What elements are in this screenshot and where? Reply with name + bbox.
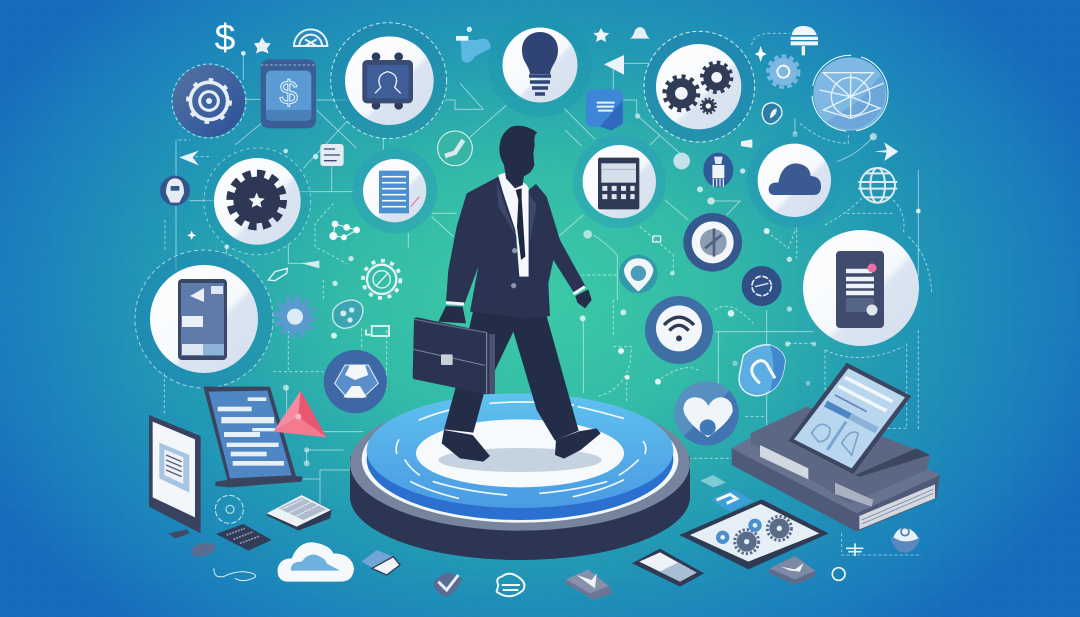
panel: cloud circle: [747, 133, 842, 228]
buttons: [512, 248, 517, 253]
icon: squiggle: [214, 568, 256, 581]
icon: dollar card: $: [279, 75, 298, 112]
briefcase: [413, 317, 495, 394]
icon: blob network: [333, 300, 363, 328]
icon: location pin: [619, 255, 658, 293]
upper right icon cluster: [558, 26, 932, 306]
shirt: [498, 172, 529, 277]
icon: blue puzzle: [456, 27, 491, 63]
icon: check badge: [433, 573, 462, 597]
icon: compass badge: [683, 213, 742, 272]
icon: monitor: [149, 415, 201, 539]
icon: arc badge: [294, 29, 327, 46]
icon: leaf pin: [762, 103, 782, 124]
trousers: [444, 307, 579, 441]
businessman silhouette: [413, 126, 601, 462]
icon: laptop keyboard: [266, 495, 332, 531]
panel: star gear circle: [204, 148, 311, 255]
lower right devices: [565, 296, 940, 600]
icon: right arrow: [874, 142, 898, 161]
icon: sparkle: [187, 231, 196, 240]
icon: star: [254, 37, 271, 53]
cuffs: [446, 287, 585, 304]
icon: tablet on books: [788, 363, 911, 474]
tie: [516, 188, 525, 260]
icon: t-shaped marker: [846, 543, 863, 556]
icon: dollar card: [261, 59, 316, 128]
panel: tablet circle: [803, 230, 919, 346]
icon: line globe: [858, 168, 897, 203]
icon: pointer triangle: [302, 261, 319, 268]
icon: gear: [276, 298, 314, 335]
left hand and handle: [438, 306, 466, 323]
icon: hexagon badge: [324, 350, 387, 413]
icon: pink pyramid: [273, 391, 327, 437]
back shoe: [442, 430, 490, 462]
icon: small robot badge: [160, 176, 190, 206]
icon: standing tablet: [203, 387, 302, 487]
panel: phone circle: [135, 250, 273, 388]
icon: grey tile left: [565, 569, 612, 600]
icon: target gear badge: [172, 64, 246, 138]
icon: book stack: [732, 407, 940, 532]
icon: white cloud: [278, 542, 354, 582]
icon: small phone: [632, 549, 704, 587]
upper left icon cluster: [160, 16, 507, 300]
icon: usb badge: [703, 153, 733, 187]
front shoe: [555, 428, 601, 459]
icon: check badge: [438, 131, 472, 166]
icon: shield swirl: [739, 345, 785, 396]
icon: molecule: [329, 221, 360, 240]
icon: navy globe badge: [742, 266, 782, 306]
panel: document circle: [352, 148, 437, 233]
lower left devices: [149, 298, 524, 597]
icon: left arrow: [179, 151, 199, 165]
icon: bowl: [891, 527, 920, 553]
icon: black keyboard: [216, 524, 272, 551]
dot: [673, 153, 690, 169]
icon: burger: [497, 574, 524, 596]
icon: dollar sign: $: [215, 16, 236, 58]
icon: sparkle: [755, 46, 767, 62]
icon: wifi badge: [645, 296, 713, 364]
lapel: [497, 182, 517, 237]
icon: small map tiles: [700, 475, 753, 512]
icon: outlined gear: [363, 261, 400, 298]
panel: calculator circle: [573, 135, 666, 228]
right hand: [575, 289, 592, 308]
icon: grey tile right: [769, 556, 815, 585]
panel: gears circle: [644, 31, 755, 142]
icon: device: [362, 550, 400, 575]
platform: [350, 393, 690, 560]
panel: safe icon circle: [331, 23, 447, 139]
icon: small chat tag: [653, 236, 661, 242]
icon: pencil: [268, 268, 287, 281]
icon: ring: [832, 568, 845, 580]
lightbulb circle: [488, 13, 592, 117]
icon: heart badge: [675, 381, 739, 445]
icon: dashed dial: [215, 495, 243, 523]
icon: small monitor: [366, 326, 389, 336]
icon: globe sphere: [812, 55, 888, 131]
icon: mouse: [191, 543, 216, 557]
icon: blue chat document: [586, 89, 623, 131]
head: [499, 126, 537, 188]
icon: small speaker: [741, 139, 752, 148]
icon: dome: [630, 27, 650, 39]
icon: star: [593, 28, 609, 42]
icon: lying tablet with gears: [679, 499, 829, 569]
icon: pale blue gear: [768, 56, 799, 87]
icon: flag arrow: [604, 55, 624, 75]
icon: list card: [320, 144, 344, 166]
icon: cloud stack: [791, 26, 818, 55]
jacket: [446, 177, 586, 318]
